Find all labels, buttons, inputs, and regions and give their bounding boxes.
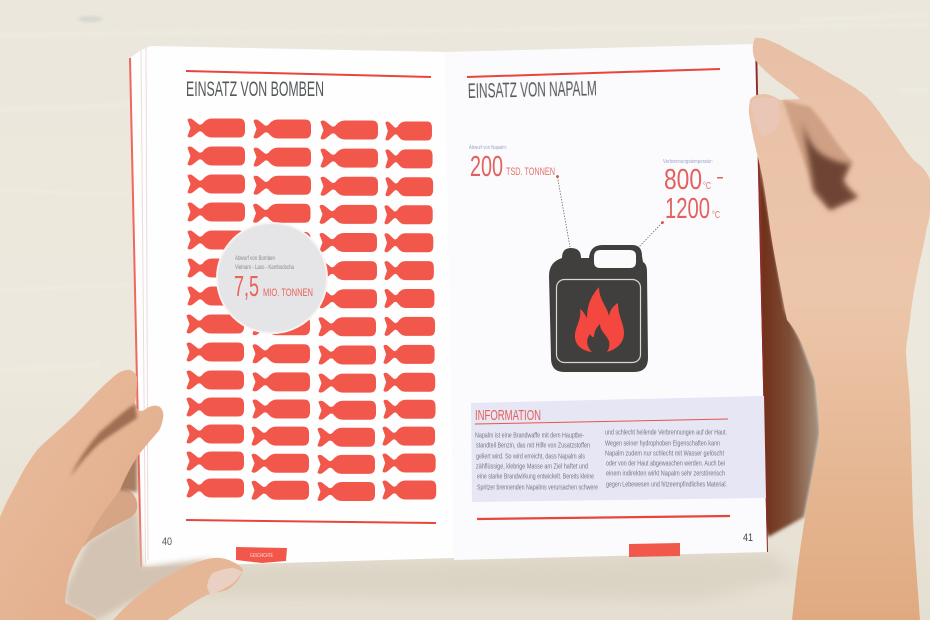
page number 40: 40 — [162, 536, 172, 548]
information text: left column: standteil Benzin, das mit Hilfe von Zusatzstoffen — [476, 440, 590, 450]
dark gap between fingers — [802, 122, 858, 210]
open booklet — [130, 44, 768, 567]
left page bottom rule — [186, 520, 436, 523]
right page title: EINSATZ VON NAPALM — [468, 77, 597, 103]
right page — [445, 44, 767, 560]
statistic: 800 to 1200 degrees — [663, 159, 723, 225]
circle figure: MIO. TONNEN — [263, 287, 313, 299]
information text: left column: zähflüssige, klebrige Masse am Ziel haftet und — [476, 462, 588, 470]
information text: right column: und schlecht heilende Verbrennungen auf der Haut. — [605, 428, 727, 436]
gap between index and middle finger — [70, 404, 137, 477]
left thumb nail — [207, 568, 242, 595]
hand and forearm silhouette — [749, 38, 930, 620]
left page heading rule — [186, 71, 431, 77]
information heading: INFORMATION — [475, 407, 541, 424]
circle figure: 7,5 — [234, 271, 259, 303]
information text: right column: Wegen seiner hydrophoben Eigenschaften kann — [605, 438, 720, 448]
shadow under the left hand — [65, 510, 213, 620]
left page tab: Geschichte — [236, 547, 287, 563]
information text: left column: Napalm ist eine Brandwaffe mit dem Hauptbe- — [475, 430, 584, 440]
right page heading rule — [467, 69, 720, 77]
statistic: 200 Tsd. Tonnen: TSD. TONNEN — [506, 166, 555, 178]
hand shadow on the table beside the book — [758, 150, 820, 537]
information text: left column: eine starke Brandwirkung entwickelt. Bereits kleine — [477, 472, 594, 480]
circle caption — [235, 255, 294, 271]
callout circle: 7,5 Mio. Tonnen — [217, 223, 327, 333]
index finger, middle finger and palm — [0, 370, 163, 620]
information panel — [471, 396, 766, 502]
left page tab: Geschichte: GESCHICHTE — [250, 553, 273, 559]
information text: right column: gegen Lebewesen und hitzeempfindliches Material. — [606, 480, 727, 488]
dotted leader lines — [556, 175, 664, 248]
circle caption: Vietnam - Laos - Kambodscha — [235, 264, 294, 271]
statistic: 200 Tsd. Tonnen: 200 — [470, 151, 503, 183]
ring finger — [70, 488, 137, 560]
left hand holding the page — [0, 370, 243, 620]
statistic: 800 to 1200 degrees: Verbrennungstemperatur: — [663, 159, 713, 165]
statistic: 800 to 1200 degrees: 1200 — [665, 193, 710, 225]
circle caption: Abwurf von Bomben — [235, 255, 275, 262]
right thumb nail — [751, 98, 780, 137]
information text: right column: einem indirekten wirkt Napalm sehr zerstörerisch — [606, 468, 725, 478]
page stack and left page — [130, 46, 454, 567]
information text: left column: Spritzer brennenden Napalms verursachen schwere — [477, 482, 598, 492]
middle finger in shade — [783, 100, 858, 210]
information text: right column: oder von der Haut abgewaschen werden. Auch bei — [606, 458, 725, 468]
information text: left column: geliert wird. So wird erreicht, dass Napalm als — [476, 452, 585, 460]
thumb — [97, 558, 243, 620]
jerrycan label outline — [556, 280, 640, 362]
right page edge — [755, 44, 768, 552]
flame — [575, 287, 624, 352]
right page bottom rule — [477, 516, 730, 519]
page stack layers — [141, 48, 148, 563]
information text: right column — [605, 428, 727, 488]
information text: left column — [475, 430, 598, 492]
icon: jerrycan with flame — [549, 245, 648, 372]
page number 41: 41 — [743, 532, 753, 544]
shade behind fingers — [118, 420, 137, 492]
right page tab — [629, 543, 680, 557]
statistic: 200 Tsd. Tonnen — [469, 145, 555, 183]
pictogram: rows of bombs — [186, 118, 436, 501]
jerrycan body — [549, 245, 648, 372]
circle figure — [234, 271, 313, 303]
statistic: 800 to 1200 degrees: 800 — [664, 164, 702, 196]
statistic: 800 to 1200 degrees: °C — [703, 181, 711, 192]
red edge trim of the page stack — [130, 58, 141, 567]
statistic: 200 Tsd. Tonnen: Abwurf von Napalm: — [469, 145, 507, 151]
statistic: 800 to 1200 degrees: °C — [712, 210, 720, 221]
information text: right column: Napalm zudem nur schlecht mit Wasser gelöscht — [605, 448, 725, 458]
right hand holding the page — [749, 38, 930, 620]
left page title: EINSATZ VON BOMBEN — [186, 78, 324, 101]
